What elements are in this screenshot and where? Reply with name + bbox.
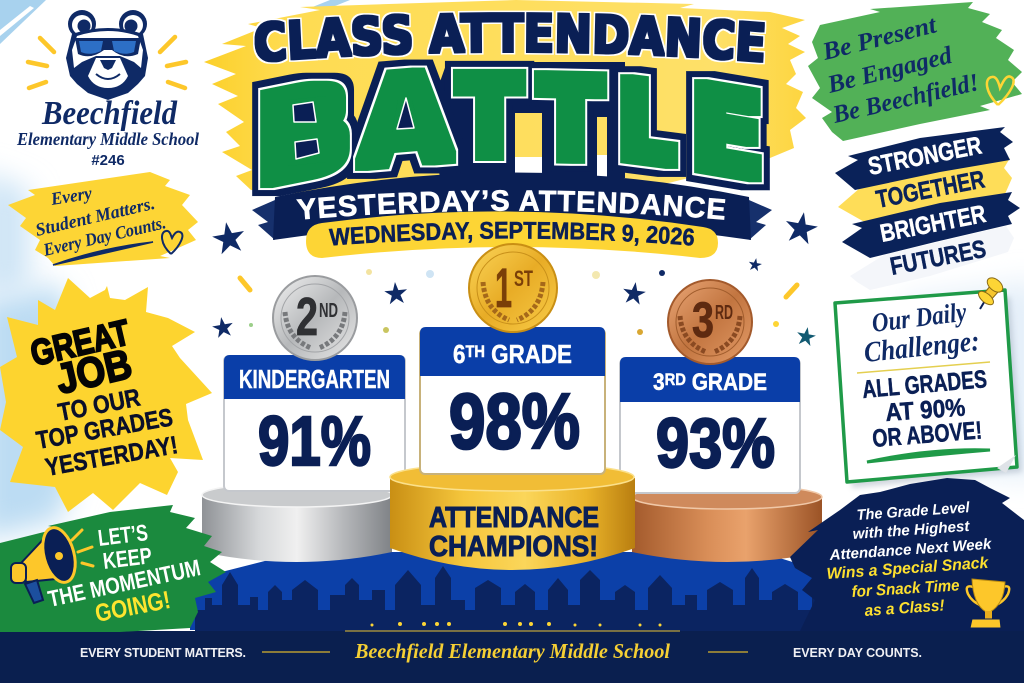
green underline xyxy=(867,450,990,462)
decorative stars xyxy=(210,209,820,347)
challenge heading: Challenge: xyxy=(862,325,981,369)
medal label: 1 xyxy=(495,256,512,319)
string lights xyxy=(370,622,662,626)
icon: bronze medal xyxy=(668,280,752,364)
slogan text: Be Beechfield! xyxy=(829,69,982,129)
challenge text: OR ABOVE! xyxy=(871,416,983,453)
icon: gold medal: ST xyxy=(514,266,533,291)
school number: #246 xyxy=(91,152,125,169)
medal label: 2 xyxy=(296,287,318,347)
heading: battle: L xyxy=(618,59,675,189)
momentum text: GOING! xyxy=(93,586,173,628)
prize text: Wins a Special Snack xyxy=(826,555,990,583)
great job text: TOP GRADES xyxy=(34,403,175,455)
grade label: 6 xyxy=(453,339,467,369)
underline swoosh xyxy=(53,242,153,265)
momentum text xyxy=(46,519,203,628)
percentage: 93% xyxy=(656,404,775,482)
heading: battle: T xyxy=(458,53,521,181)
icon: heart xyxy=(162,231,182,254)
grade label: KINDERGARTEN xyxy=(239,364,390,394)
icon: silver medal xyxy=(273,276,357,360)
card: third grade xyxy=(620,357,800,493)
date pill xyxy=(306,211,718,258)
stripe text: BRIGHTER xyxy=(878,200,988,248)
slogan text: Be Engaged xyxy=(824,42,955,99)
laurel xyxy=(680,316,740,352)
panel: podium bronze xyxy=(632,485,822,562)
percentage: 91% xyxy=(258,402,371,480)
motto text: Every xyxy=(49,183,94,209)
challenge text: AT 90% xyxy=(884,393,966,427)
great job text: YESTERDAY! xyxy=(43,431,180,482)
title brush stroke xyxy=(204,0,806,200)
great job text: JOB xyxy=(51,340,136,403)
ribbon text: YESTERDAY’S ATTENDANCE xyxy=(296,190,726,220)
prize text: as a Class! xyxy=(864,597,946,620)
school subtitle: Elementary Middle School xyxy=(16,129,199,149)
footer school name: Beechfield Elementary Middle School xyxy=(354,639,670,663)
stripe text xyxy=(866,131,988,281)
white paper showing through gaps xyxy=(510,155,612,180)
prize text: with the Highest xyxy=(852,518,971,543)
date text: WEDNESDAY, SEPTEMBER 9, 2026 xyxy=(328,222,694,246)
ribbon: yesterday's attendance xyxy=(252,172,772,240)
great job text xyxy=(27,311,180,482)
panel: podium silver xyxy=(202,483,392,562)
panel: keep the momentum xyxy=(0,505,226,632)
challenge text xyxy=(861,365,988,453)
blue band with city skyline xyxy=(190,552,835,631)
slogan text xyxy=(819,11,982,129)
heading: battle: T xyxy=(540,54,602,185)
momentum text: KEEP xyxy=(101,542,153,574)
stripe text: FUTURES xyxy=(888,235,988,281)
icon: trophy xyxy=(967,579,1009,628)
footer right text: EVERY DAY COUNTS. xyxy=(793,646,922,660)
grade label: 3 xyxy=(653,369,666,396)
grade label: GRADE xyxy=(686,369,767,396)
medal label: 3 xyxy=(692,292,714,348)
heading: battle xyxy=(254,47,764,213)
prize text: Attendance Next Week xyxy=(828,536,993,564)
panel: stronger together stripes xyxy=(835,127,1020,290)
grade label: RD xyxy=(665,370,686,389)
challenge heading xyxy=(862,296,981,369)
heading: battle: E xyxy=(690,62,764,205)
icon: heart yellow xyxy=(987,76,1014,105)
card: kindergarten xyxy=(224,355,405,491)
footer bar xyxy=(0,622,1024,683)
heading: class attendance: CLASS ATTENDANCE xyxy=(253,10,766,64)
card: sixth grade xyxy=(420,327,605,474)
panel: great job starburst xyxy=(0,278,212,512)
great job text: TO OUR xyxy=(56,384,143,427)
momentum text: THE MOMENTUM xyxy=(46,554,203,612)
icon: bronze medal: RD xyxy=(715,302,733,324)
panel: snack prize xyxy=(790,478,1024,631)
heading: battle: A xyxy=(360,47,451,193)
podium label line two: CHAMPIONS! xyxy=(429,531,598,563)
panel: podium gold xyxy=(390,463,635,570)
battle letter counters xyxy=(288,96,420,166)
stripe text: TOGETHER xyxy=(874,165,987,214)
icon: push pin xyxy=(976,275,1005,309)
prize text: The Grade Level xyxy=(856,499,971,524)
motto text xyxy=(33,183,168,260)
laurel xyxy=(483,282,543,320)
challenge heading: Our Daily xyxy=(870,296,969,338)
grade label: TH xyxy=(465,342,485,361)
heading: battle: B xyxy=(254,55,353,213)
icon: bear mascot xyxy=(66,10,148,100)
grade label: GRADE xyxy=(485,339,572,369)
school name: Beechfield xyxy=(41,95,178,132)
prize text: for Snack Time xyxy=(851,577,960,601)
panel: every student matters xyxy=(8,172,198,266)
prize text xyxy=(826,499,993,620)
footer left text: EVERY STUDENT MATTERS. xyxy=(80,646,246,660)
sun rays xyxy=(28,37,186,88)
percentage: 98% xyxy=(449,377,580,465)
panel: daily challenge note xyxy=(835,275,1022,488)
great job text: GREAT xyxy=(27,311,133,374)
motto text: Every Day Counts. xyxy=(41,212,168,260)
battle letter backing xyxy=(430,62,625,178)
icon: gold medal xyxy=(469,244,557,332)
icon: megaphone xyxy=(11,524,93,603)
motto text: Student Matters. xyxy=(33,193,157,240)
stripe text: STRONGER xyxy=(866,131,984,181)
challenge text: ALL GRADES xyxy=(861,365,988,404)
laurel xyxy=(285,312,345,348)
icon: silver medal: ND xyxy=(319,300,338,322)
panel: be present xyxy=(808,2,1022,141)
slogan text: Be Present xyxy=(819,11,940,66)
school logo xyxy=(16,10,199,169)
confetti xyxy=(240,269,797,335)
podium label: ATTENDANCE xyxy=(429,502,599,534)
momentum text: LET’S xyxy=(96,519,149,551)
